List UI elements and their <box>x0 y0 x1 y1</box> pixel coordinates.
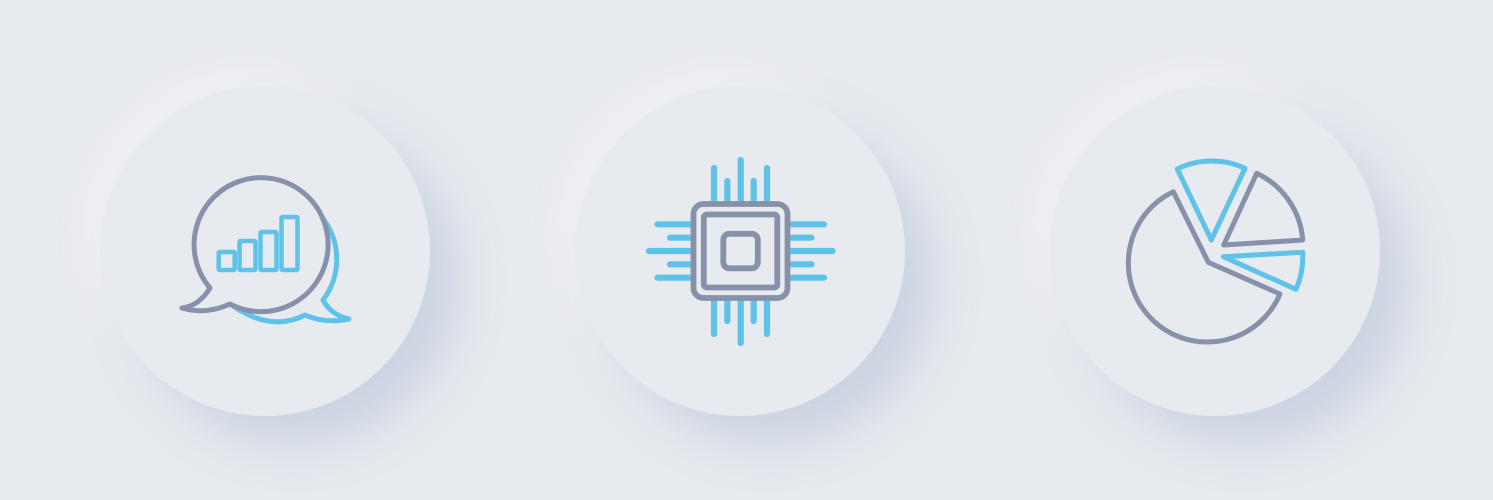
chip body <box>694 204 788 298</box>
icon: exploded pie chart <box>1128 161 1303 342</box>
large gray pie slice <box>1128 192 1280 342</box>
panel: right circle <box>1050 86 1380 416</box>
blue back speech bubble <box>225 215 349 322</box>
icon: microchip <box>649 160 832 343</box>
gray right slice <box>1224 173 1303 245</box>
gray front speech bubble <box>182 178 328 312</box>
icon: speech bubbles with signal bars <box>182 178 349 322</box>
chip pins <box>649 160 832 343</box>
signal bars <box>219 217 298 270</box>
blue top slice <box>1177 161 1245 240</box>
panel: middle circle <box>575 86 905 416</box>
panel: left circle <box>100 86 430 416</box>
blue small slice <box>1223 252 1303 289</box>
